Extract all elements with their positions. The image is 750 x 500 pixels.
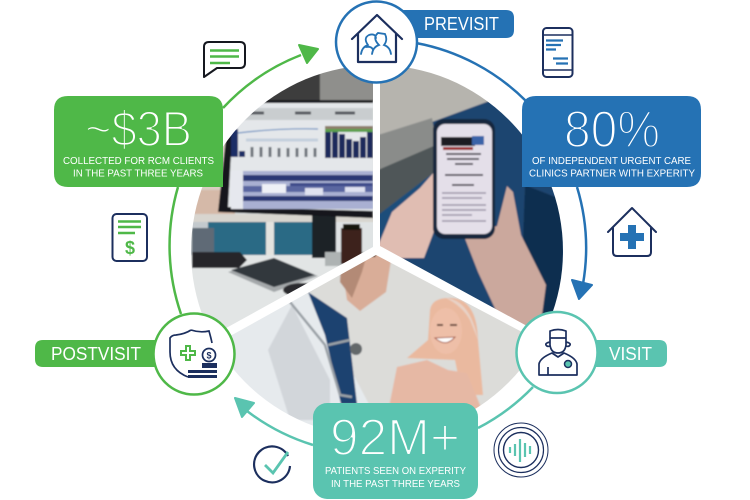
arrowhead: blue: [572, 280, 592, 299]
label: postvisit: POSTVISIT: [51, 344, 141, 364]
stat panel: partners: OF INDEPENDENT URGENT CARE: [532, 155, 691, 167]
stat panel: partners: CLINICS PARTNER WITH EXPERITY: [529, 168, 695, 180]
photo circle: [191, 68, 563, 426]
arc: postvisit to previsit: [170, 55, 301, 314]
arrowhead: green: [299, 45, 318, 63]
arc: previsit to visit: [416, 43, 586, 284]
icon: check in circle: [254, 446, 290, 482]
node: visit clinician: [516, 312, 598, 393]
icon: sound wave rings: [494, 423, 548, 477]
stat panel: collected: [54, 96, 223, 187]
arc: visit to postvisit: [247, 387, 533, 445]
icon: house with cross: [608, 208, 656, 256]
icon: chat bubble: [204, 42, 245, 77]
label: previsit: PREVISIT: [424, 14, 499, 34]
stat panel: collected: ~$3B: [85, 101, 192, 157]
icon: invoice with dollar: $: [125, 238, 135, 258]
node: previsit house with people: [336, 2, 417, 82]
stat panel: patients: 92M+: [330, 409, 460, 467]
label: visit: [580, 340, 667, 367]
node: postvisit shield and coins: $: [206, 350, 212, 360]
stat panel: patients: [313, 403, 478, 499]
stat panel: partners: [522, 96, 701, 187]
stat panel: collected: IN THE PAST THREE YEARS: [73, 168, 203, 180]
stat panel: collected: COLLECTED FOR RCM CLIENTS: [63, 155, 214, 167]
photo: doctor and patient: [232, 255, 521, 426]
arrowhead: teal: [235, 398, 254, 417]
icon: invoice with dollar: [112, 214, 147, 261]
photo: analytics dashboard on monitor: [191, 68, 373, 328]
icon: mobile phone: [543, 28, 572, 77]
stat panel: partners: 80%: [564, 101, 660, 159]
label: previsit: [400, 10, 514, 38]
label: postvisit: [35, 340, 170, 367]
node: postvisit shield and coins: [154, 314, 234, 394]
stat panel: patients: PATIENTS SEEN ON EXPERITY: [325, 465, 466, 477]
stat panel: patients: IN THE PAST THREE YEARS: [331, 478, 460, 490]
label: visit: VISIT: [609, 344, 652, 364]
photo: hands holding phone: [380, 68, 563, 326]
